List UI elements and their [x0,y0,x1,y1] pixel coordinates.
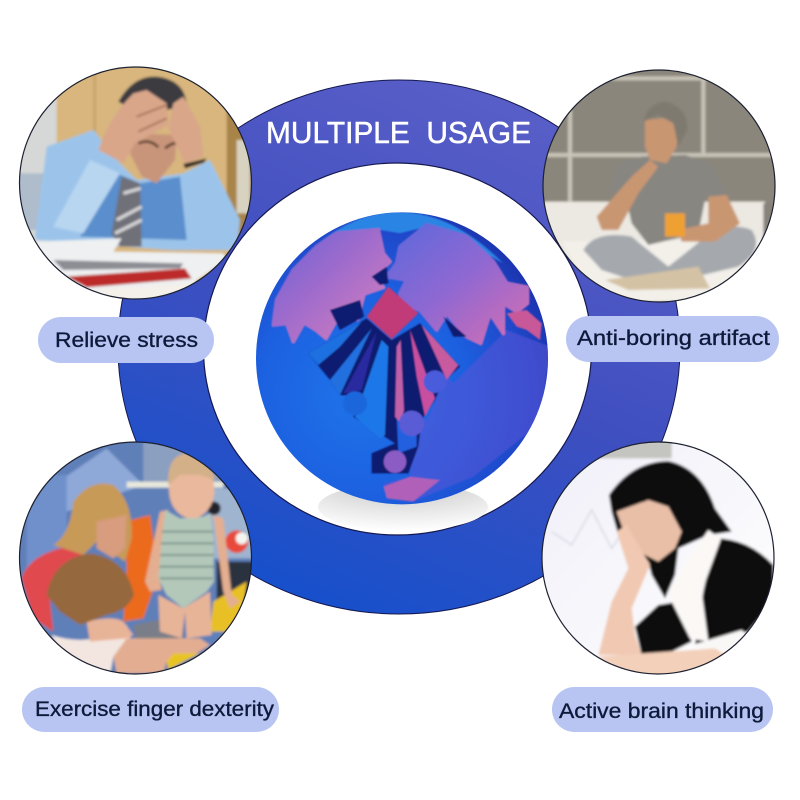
central cavity [308,318,460,473]
arm [598,525,650,655]
yellow truck [210,582,247,632]
label: exercise finger dexterity: Exercise finger dexterity [35,698,275,721]
pink ridges [395,325,458,423]
label: relieve stress [38,317,214,363]
gear ball [256,212,550,504]
left gear [273,230,390,342]
infographic canvas [18,66,779,732]
photo: stressed man [20,68,251,298]
newspaper [605,267,710,290]
tie [112,177,142,247]
white cuff [692,630,752,655]
photo frame: thinking woman [542,442,774,674]
toy [225,530,248,553]
label: anti-boring artifact: Anti-boring artifact [577,327,770,350]
mother hair [53,484,132,562]
shirt [627,154,706,246]
wristwatch [183,158,207,168]
blouse black [635,602,692,655]
dark gaps below gears [330,267,467,337]
red binder [67,268,192,287]
forearm lower [598,648,735,682]
ball shadow [318,483,488,531]
mother body [22,545,90,632]
mother face [97,515,127,558]
photo: thinking woman [535,435,785,685]
right edge pink teeth [507,310,542,340]
photo frame: relaxed man [543,70,775,302]
label: active brain thinking: Active brain thinking [559,700,764,723]
child front [50,634,131,671]
label: relieve stress: Relieve stress [55,329,198,352]
toddler arms [145,510,168,592]
blue ridges [308,322,417,453]
child hair [47,553,134,625]
photo frame: mother and children [20,442,252,674]
pink tooth accent [383,477,440,502]
photo: relaxed man on bed [544,70,774,302]
left hand [98,90,168,163]
pants [583,227,756,280]
toddler head [169,462,214,518]
yellow toy [167,653,200,670]
top band of the ball [307,212,503,263]
juice glass [665,213,685,237]
background ring [118,80,680,614]
photo frame: stressed man [20,67,252,299]
orange toy [123,515,158,622]
label: active brain thinking [552,687,773,732]
right purple sheen [383,330,550,500]
shirt [35,130,240,250]
hair [609,461,732,598]
centre diamond [367,287,418,339]
head [645,117,678,163]
right gear [387,225,527,343]
white collar [668,530,721,642]
title: MULTIPLE USAGE [266,115,531,150]
photo: mother and children [20,442,251,674]
rounded gear lobes [343,370,446,473]
hair [118,77,187,110]
toddler vest [158,510,214,608]
face [617,500,682,562]
arms [597,160,658,230]
label: anti-boring artifact [566,316,779,362]
right hand [168,97,203,163]
papers [36,236,226,291]
face [130,133,177,183]
toddler legs [158,592,212,638]
label: exercise finger dexterity [22,687,279,732]
